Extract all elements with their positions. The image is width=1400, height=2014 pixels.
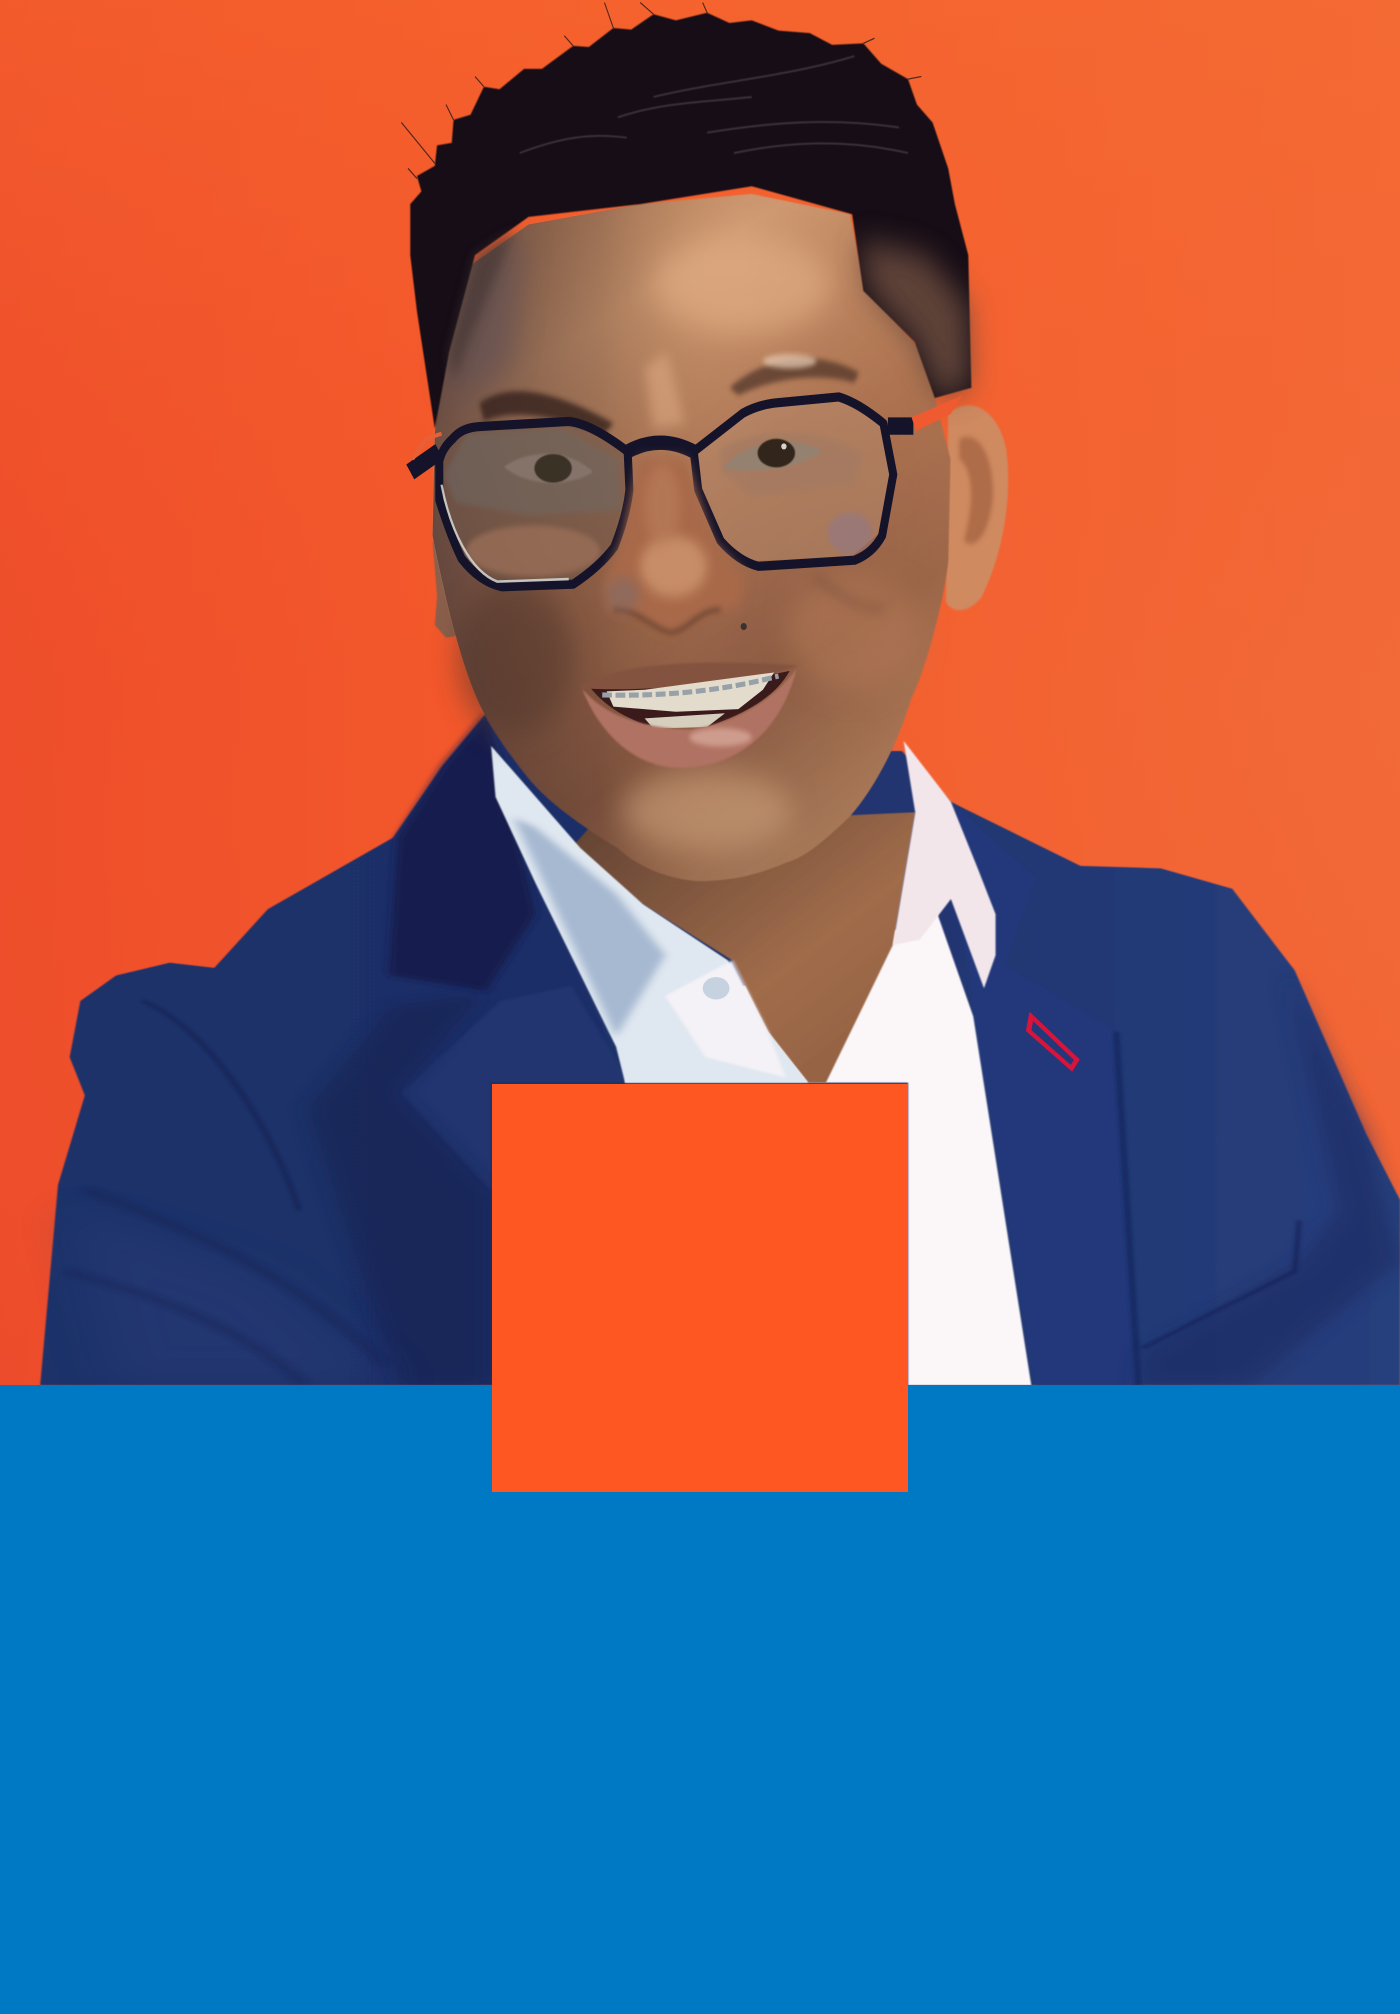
brow highlight bbox=[763, 354, 816, 368]
right ear inner shade bbox=[959, 437, 993, 544]
nose bbox=[604, 459, 745, 635]
left collar shade bbox=[513, 817, 665, 1037]
right collar bbox=[893, 741, 996, 988]
portrait photo illustration bbox=[0, 0, 1400, 1385]
left lens reflection bbox=[445, 429, 622, 515]
lower teeth bbox=[645, 713, 725, 729]
upper teeth with braces bbox=[602, 672, 779, 712]
lens lower rim shine bbox=[442, 485, 569, 582]
right cheek bbox=[787, 577, 921, 689]
collar tip highlight bbox=[665, 960, 786, 1078]
left iris bbox=[534, 454, 572, 483]
left cheek shadow bbox=[457, 582, 573, 735]
orange studio background bbox=[0, 0, 1400, 1385]
right ear bbox=[946, 405, 1008, 610]
right lens tint bbox=[696, 401, 891, 561]
chin light bbox=[622, 770, 792, 852]
upper lip bbox=[580, 662, 799, 692]
glabella shine bbox=[645, 352, 685, 429]
left lower lapel bbox=[402, 986, 629, 1190]
forehead highlight bbox=[654, 237, 832, 334]
blazer bbox=[40, 713, 1400, 1385]
shirt front bbox=[625, 914, 1031, 1385]
right lapel edge bbox=[1116, 1032, 1138, 1385]
mouth interior bbox=[591, 671, 790, 727]
sleeve shading bbox=[71, 1210, 393, 1384]
face side shading bbox=[433, 194, 950, 881]
left temple shadow bbox=[446, 230, 529, 398]
hair fade right bbox=[859, 240, 970, 398]
right eye bbox=[723, 441, 823, 471]
hair bbox=[410, 13, 971, 429]
face bbox=[433, 194, 950, 881]
body: blazer and shirt bbox=[40, 713, 1400, 1385]
lower lip bbox=[582, 669, 796, 768]
left lapel shading bbox=[388, 713, 536, 991]
right iris bbox=[758, 439, 795, 467]
right temple arm bbox=[912, 395, 962, 431]
left lens tint bbox=[442, 424, 628, 584]
collar button bbox=[703, 977, 729, 999]
red lapel stitch bbox=[1029, 1016, 1077, 1068]
right eyebrow bbox=[729, 359, 859, 395]
right sleeve shadow bbox=[1138, 970, 1400, 1385]
pocket line bbox=[1143, 1220, 1299, 1348]
cheek crease bbox=[814, 577, 886, 608]
neck bbox=[571, 812, 915, 1083]
lip shine bbox=[689, 728, 752, 746]
hair highlights bbox=[520, 56, 908, 153]
hair fine spikes bbox=[401, 3, 921, 179]
glasses frame bbox=[410, 397, 913, 587]
orange square bbox=[492, 1084, 908, 1492]
left eyebrow bbox=[479, 391, 613, 434]
mole bbox=[741, 623, 747, 630]
left lens skin bbox=[466, 526, 600, 577]
left ear bbox=[433, 541, 459, 638]
right lapel bbox=[951, 802, 1138, 1385]
sleeve fold lines bbox=[67, 1190, 384, 1384]
left temple arm bbox=[412, 434, 442, 459]
lapel shadow bbox=[308, 993, 491, 1385]
right eye socket bbox=[721, 432, 863, 497]
right catchlight bbox=[781, 443, 787, 449]
shoulder seam bbox=[143, 1001, 299, 1210]
head bbox=[401, 3, 1008, 881]
hair fade left bbox=[449, 230, 515, 383]
left eye bbox=[504, 454, 593, 483]
left collar bbox=[491, 746, 808, 1083]
lens purple shade bbox=[828, 513, 872, 554]
blue panel bbox=[0, 1385, 1400, 2014]
